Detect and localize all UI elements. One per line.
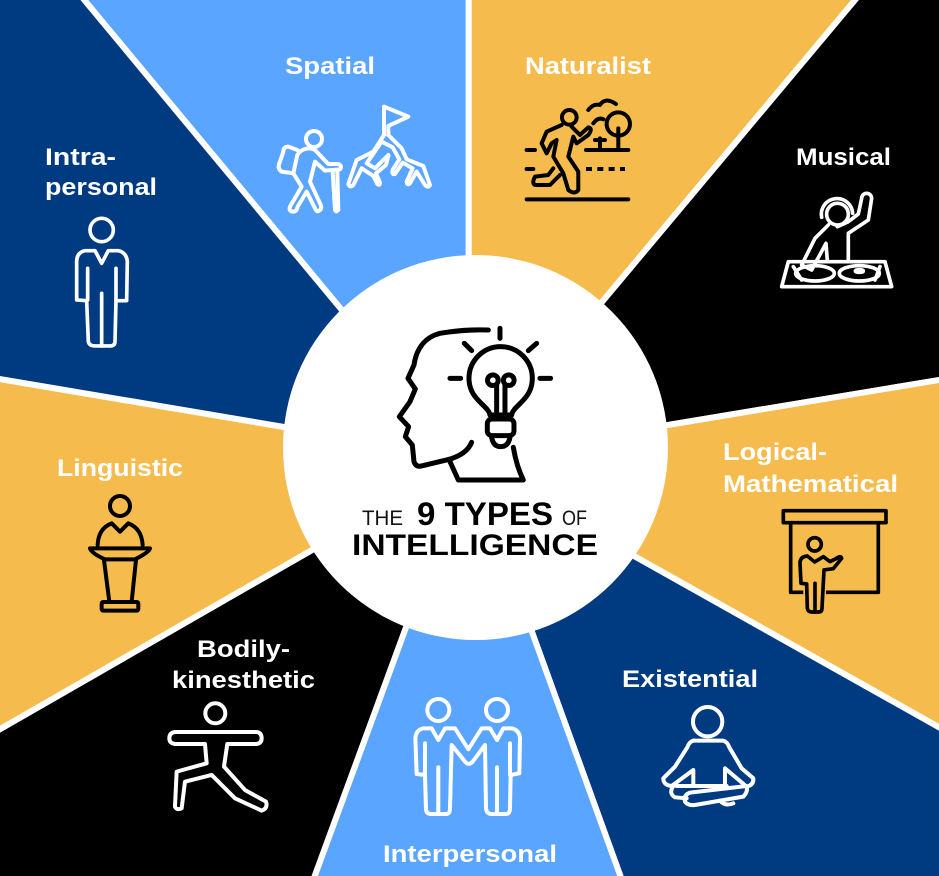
icon: standing person: [77, 218, 127, 346]
icon: runner in nature: [527, 101, 630, 199]
label: interpersonal: Interpersonal: [383, 841, 557, 868]
panel: musical: [475, 0, 939, 447]
panel: intrapersonal: [0, 0, 475, 447]
panel: spatial: [76, 0, 475, 447]
label: bodily-kinesthetic: [172, 636, 315, 694]
panel: bodily-kinesthetic: [0, 447, 475, 876]
panel: interpersonal: [311, 447, 624, 876]
icon: hiker and mountain flag: [279, 107, 430, 212]
icon: head with lightbulb: [399, 328, 551, 480]
label: intrapersonal: personal: [45, 174, 157, 201]
label: spatial: Spatial: [285, 53, 375, 80]
icon: speaker at lectern: [90, 496, 150, 611]
panel: linguistic: [0, 377, 475, 736]
label: logical-mathematical: Logical-: [723, 439, 827, 466]
label: logical-mathematical: Mathematical: [723, 471, 898, 498]
centre circle: [283, 255, 668, 640]
panel: naturalist: [469, 0, 863, 447]
label: bodily-kinesthetic: Bodily-: [197, 636, 290, 663]
label: existential: Existential: [622, 666, 758, 693]
title: 9 TYPES: [417, 496, 553, 532]
title: [352, 496, 598, 562]
icon: yoga warrior pose: [169, 703, 267, 811]
icon: meditating person: [663, 707, 753, 805]
label: logical-mathematical: [723, 439, 898, 498]
label: intrapersonal: [45, 144, 157, 201]
panel: logical-mathematical: [475, 378, 939, 734]
title: INTELLIGENCE: [352, 529, 598, 562]
icon: presenter at screen: [783, 511, 886, 612]
label: linguistic: Linguistic: [57, 455, 183, 482]
label: naturalist: Naturalist: [525, 53, 651, 80]
label: bodily-kinesthetic: kinesthetic: [172, 667, 315, 694]
panel: existential: [475, 447, 939, 876]
icon: two people holding hands: [415, 699, 520, 814]
icon: DJ at turntables: [782, 193, 892, 287]
title: OF: [562, 507, 587, 530]
title: THE: [362, 507, 403, 530]
label: intrapersonal: Intra-: [45, 144, 116, 171]
label: musical: Musical: [796, 144, 891, 171]
